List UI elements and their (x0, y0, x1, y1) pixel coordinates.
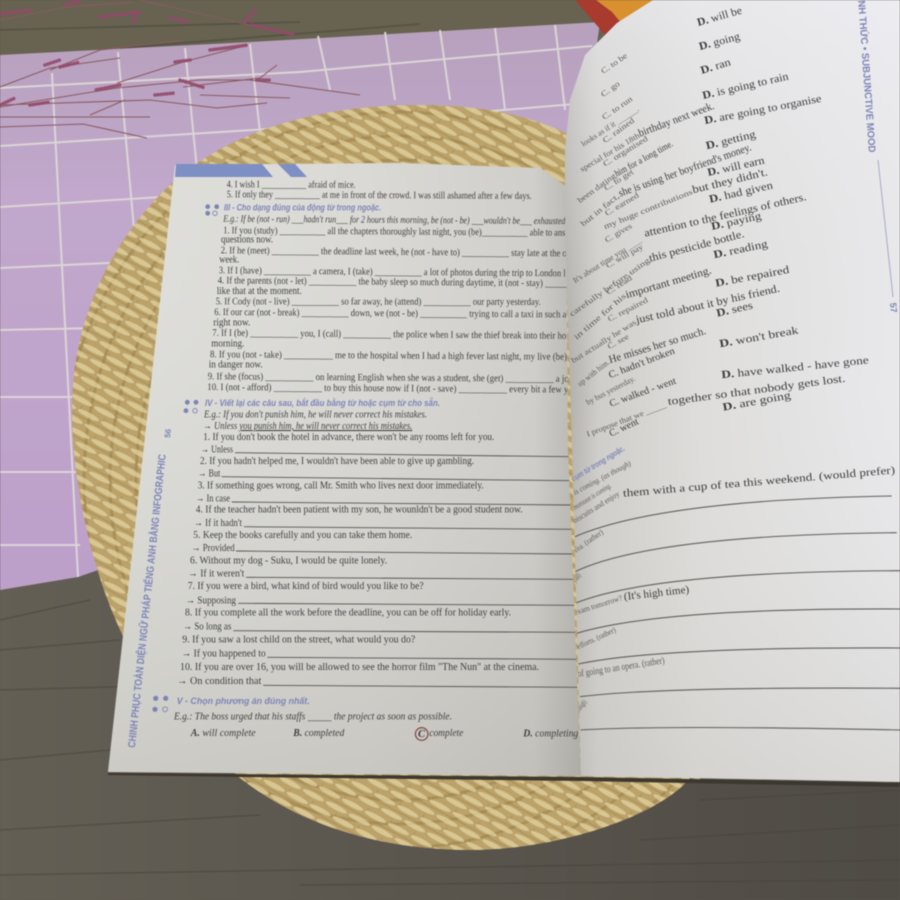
section IV exercises (177, 432, 577, 687)
right page number: 57 (888, 302, 899, 313)
multiple choice options D: D. be repaired (714, 264, 791, 290)
section IV exercises: → In case (196, 493, 230, 504)
section V heading: V - Chọn phương án đúng nhất. (177, 696, 310, 707)
rewrite exercises on right page: monsoon is coming. (571, 481, 613, 512)
multiple choice options C: C. see (606, 332, 631, 351)
sentences curving into the gutter: birthday next week. (637, 100, 716, 140)
section IV exercises: → Provided (192, 543, 235, 554)
rewrite exercises on right page: them with a cup of tea this weekend. (would prefer) (623, 464, 896, 500)
sentences curving into the gutter: she is using her boyfriend's money. (617, 141, 753, 200)
section IV exercises: 6. Without my dog - Suku, I would be quite lonely. (190, 555, 387, 566)
section III exercises: 8. If you (not - take) ___________ me to the hospital when I had a high fever last night, my live (be) (210, 349, 567, 363)
section V example and choices: D. completing (522, 729, 578, 740)
section V icon dots (152, 696, 168, 712)
section III exercises: 5. If Cody (not - live) ___________ so far away, he (attend) ___________ our party yesterday. (216, 296, 541, 308)
multiple choice options C: C. went (608, 416, 641, 439)
sentences curving into the gutter: by bus yesterday. (584, 374, 637, 407)
multiple choice options D: D. sees (715, 300, 754, 320)
multiple choice options C: C. go (599, 79, 621, 99)
sentences curving into the gutter: but in fact, (579, 192, 621, 228)
left book page (108, 163, 581, 776)
section III exercises: 1. If you (study) ___________ all the chapters thoroughly last night, you (be)___________ able to ans (223, 225, 565, 239)
rewrite exercises on right page: is coming. (as though) (572, 459, 633, 497)
sentences curving into the gutter (568, 100, 846, 439)
section IV exercises: 10. If you are over 16, you will be allowed to see the horror film "The Nun" at the cinema. (180, 662, 539, 673)
rewrite exercises on right page: (call) (570, 571, 583, 585)
sentences curving into the gutter: looks as if it ______. (579, 104, 641, 148)
sentences curving into the gutter: He misses her so much. (607, 325, 708, 366)
section III exercises: in danger now. (209, 360, 263, 371)
multiple choice options D: D. ran (699, 56, 733, 77)
sentences curving into the gutter: my huge contributions (602, 187, 694, 231)
sentences curving into the gutter: up with him. (576, 358, 611, 388)
section III heading: III - Cho dạng đúng của động từ trong ngoặc. (224, 203, 381, 214)
sentences curving into the gutter: in time for his (572, 291, 628, 342)
page header blue band (175, 164, 307, 177)
rewrite exercises on right page: Tea. (rather) (571, 528, 605, 555)
multiple choice options C: C. to get (602, 167, 636, 192)
multiple choice options D: D. paying (710, 210, 763, 233)
rewrite exercises on right page: (enough) (573, 698, 589, 715)
multiple choice options D: D. going (698, 31, 742, 53)
section IV exercises: → If it weren't (188, 569, 244, 580)
sentences curving into the gutter: special for his 18th (578, 131, 641, 174)
section IV exercises: 3. If something goes wrong, call Mr. Smith who lives next door immediately. (198, 481, 484, 492)
multiple choice options D: D. getting (705, 128, 758, 152)
sentences curving into the gutter: I propose that we _____ (585, 400, 668, 439)
section IV heading: IV - Viết lại các câu sau, bắt đầu bằng từ hoặc cụm từ cho sẵn. (205, 397, 440, 409)
section V example and choices: E.g.: The boss urged that his staffs _____ the project as soon as possible. (173, 711, 452, 722)
exercise text continued: 5. If only they ___________ at me in front of the crowd. I was still ashamed after a few days. (227, 189, 532, 202)
multiple choice options C: C. earned (603, 191, 640, 218)
multiple choice options C: C. to run (600, 94, 634, 122)
multiple choice options D: D. will earn (706, 155, 766, 179)
lavender tile mat (0, 22, 600, 590)
section V example and choices: B. completed (292, 728, 345, 739)
dried flower branches (0, 0, 360, 138)
section III exercises: week. (219, 255, 239, 266)
section III exercises (207, 214, 569, 396)
multiple choice options C: C. hadn't broken (607, 346, 676, 381)
section III exercises: 2. If he (meet) ___________ the deadline last week, he (not - have to) ___________ stay late at the o (221, 245, 567, 259)
multiple choice options D: D. are going (722, 389, 792, 414)
section IV exercises: → Unless (201, 445, 233, 456)
rewrite exercises on right page: of going to an opera. (rather) (577, 655, 665, 680)
section III exercises: 3. If I (have) ___________ a camera, I (take) ___________ a lot of photos during the trip to London l (219, 265, 566, 279)
section IV example: → Unless you punish him, he will never correct his mistakes. (203, 421, 412, 432)
section III exercises: 9. If she (focus) ___________ on learning English when she was a student, she (get) ___________ a jo (208, 371, 569, 385)
section III exercises: 10. I (not - afford) ___________ to buy this house now if I (not - save) ___________ every bit a few y (207, 382, 568, 396)
multiple choice options C (599, 51, 678, 439)
multiple choice options D (696, 5, 869, 414)
section IV exercises: 8. If you complete all the work before the deadline, you can be off for holiday early. (185, 608, 511, 619)
sentences curving into the gutter: carefully before using (568, 256, 651, 318)
section VI heading on right page: cụm từ trong ngoặc. (570, 444, 626, 483)
section III exercises: morning. (211, 339, 244, 350)
section V example and choices: complete (429, 728, 464, 739)
section IV exercises: → On condition that (177, 676, 261, 687)
section IV exercises: 1. If you don't book the hotel in advance, there won't be any rooms left for you. (203, 432, 494, 443)
multiple choice options D: D. won't break (718, 324, 800, 350)
exercise text continued: 4. I wish I ___________ afraid of mice. (227, 179, 356, 191)
multiple choice options D: D. reading (712, 238, 769, 261)
sentences curving into the gutter: It's about time you ____ (571, 235, 644, 285)
multiple choice options C: C. repaired (606, 295, 649, 323)
sentences curving into the gutter: this pesticide bottle. (648, 228, 746, 265)
vertical book title on left margin: CHINH PHỤC TOÀN DIỆN NGỮ PHÁP TIẾNG ANH BẰNG INFOGRAPHIC (125, 453, 169, 748)
rewrite exercises on right page (570, 459, 900, 730)
exercise text continued (227, 179, 532, 202)
product box at top (575, 0, 660, 36)
round woven straw mat (71, 104, 700, 851)
section IV exercises: 2. If you hadn't helped me, I wouldn't have been able to give up gambling. (200, 456, 474, 467)
section IV exercises: 4. If the teacher hadn't been patient with my son, he wounldn't be a good student now. (196, 505, 523, 516)
section III icon dots (205, 204, 219, 216)
multiple choice options C: C. will pay (604, 242, 645, 270)
right book page (565, 0, 900, 782)
section IV exercises: → If you happened to (182, 649, 266, 660)
sentences curving into the gutter: but they didn't. (691, 166, 769, 196)
multiple choice options C: C. read (604, 273, 634, 297)
sentences curving into the gutter: attention to the feelings of others. (643, 191, 808, 240)
section IV exercises: 7. If you were a bird, what kind of bird would you like to be? (188, 581, 424, 592)
multiple choice options C: C. rained (601, 116, 636, 145)
left page number: 56 (163, 428, 173, 438)
section V example and choices: C (418, 729, 426, 740)
section IV exercises: → If it hadn't (194, 518, 242, 529)
rewrite exercises on right page: efforts. (rather) (575, 625, 617, 651)
section V example and choices: A. will complete (190, 728, 256, 739)
multiple choice options C: C. organised (601, 134, 649, 168)
chapter title on right margin: ỊNH THỨC • SUBJUNCTIVE MOOD (855, 0, 879, 153)
sentences curving into the gutter: him for a long time. (613, 138, 675, 179)
section III exercises: like that at the moment. (217, 286, 302, 297)
section IV exercises: → So long as (183, 621, 231, 632)
section III exercises: 6. If our car (not - break) ___________ down, we (not - be) ___________ trying to call a taxi in such a (214, 307, 567, 320)
section V example and choices (173, 711, 578, 740)
section III exercises: E.g.: If be (not - run) ___hadn't run___ for 2 hours this morning, be (not - be) ___wouldn't be___ exhausted (222, 214, 566, 227)
rewrite exercises on right page: exam tomorrow? (573, 593, 624, 617)
section IV icon dots (184, 400, 198, 413)
section IV example: E.g.: If you don't punish him, he will never correct his mistakes. (203, 409, 427, 420)
section IV exercises: 5. Keep the books carefully and you can take them home. (193, 530, 412, 541)
section IV exercises: → But (198, 469, 220, 480)
section IV example (203, 409, 427, 432)
section III exercises: right now. (213, 317, 250, 328)
section III exercises: questions now. (221, 235, 273, 246)
shadow under the book (108, 773, 900, 787)
multiple choice options D: D. will be (696, 5, 743, 29)
section IV exercises: 9. If you saw a lost child on the street, what would you do? (182, 635, 416, 646)
section III exercises: 4. If the parents (not - let) ___________ the baby sleep so much during daytime, it (not - stay) _____ (218, 275, 568, 289)
rewrite exercises on right page: biscuits and enjoy (571, 489, 621, 525)
multiple choice options D: D. had given (708, 180, 775, 206)
sentences curving into the gutter: together so that nobody gets lost. (667, 373, 846, 408)
section IV exercises: → Supposing (186, 595, 237, 606)
multiple choice options C: C. gives (603, 221, 634, 244)
rewrite exercises on right page: (It's high time) (623, 584, 690, 603)
margin rule on right page (878, 160, 893, 297)
sentences curving into the gutter: but actually he was (570, 318, 638, 365)
sentences curving into the gutter: just told about it by his friend. (634, 283, 781, 326)
multiple choice options C: C. to be (599, 51, 629, 76)
sentences curving into the gutter: important meeting. (624, 264, 713, 301)
sentences curving into the gutter: been dating (576, 171, 618, 205)
multiple choice options C: C. walked - went (608, 376, 678, 410)
multiple choice options D: D. are going to organise (703, 93, 823, 127)
section III exercises: 7. If I (be) ___________ you, I (call) ___________ the police when I saw the thief break into their ho (212, 328, 566, 342)
multiple choice options D: D. have walked - have gone (721, 354, 869, 381)
multiple choice options D: D. is going to rain (701, 70, 790, 102)
